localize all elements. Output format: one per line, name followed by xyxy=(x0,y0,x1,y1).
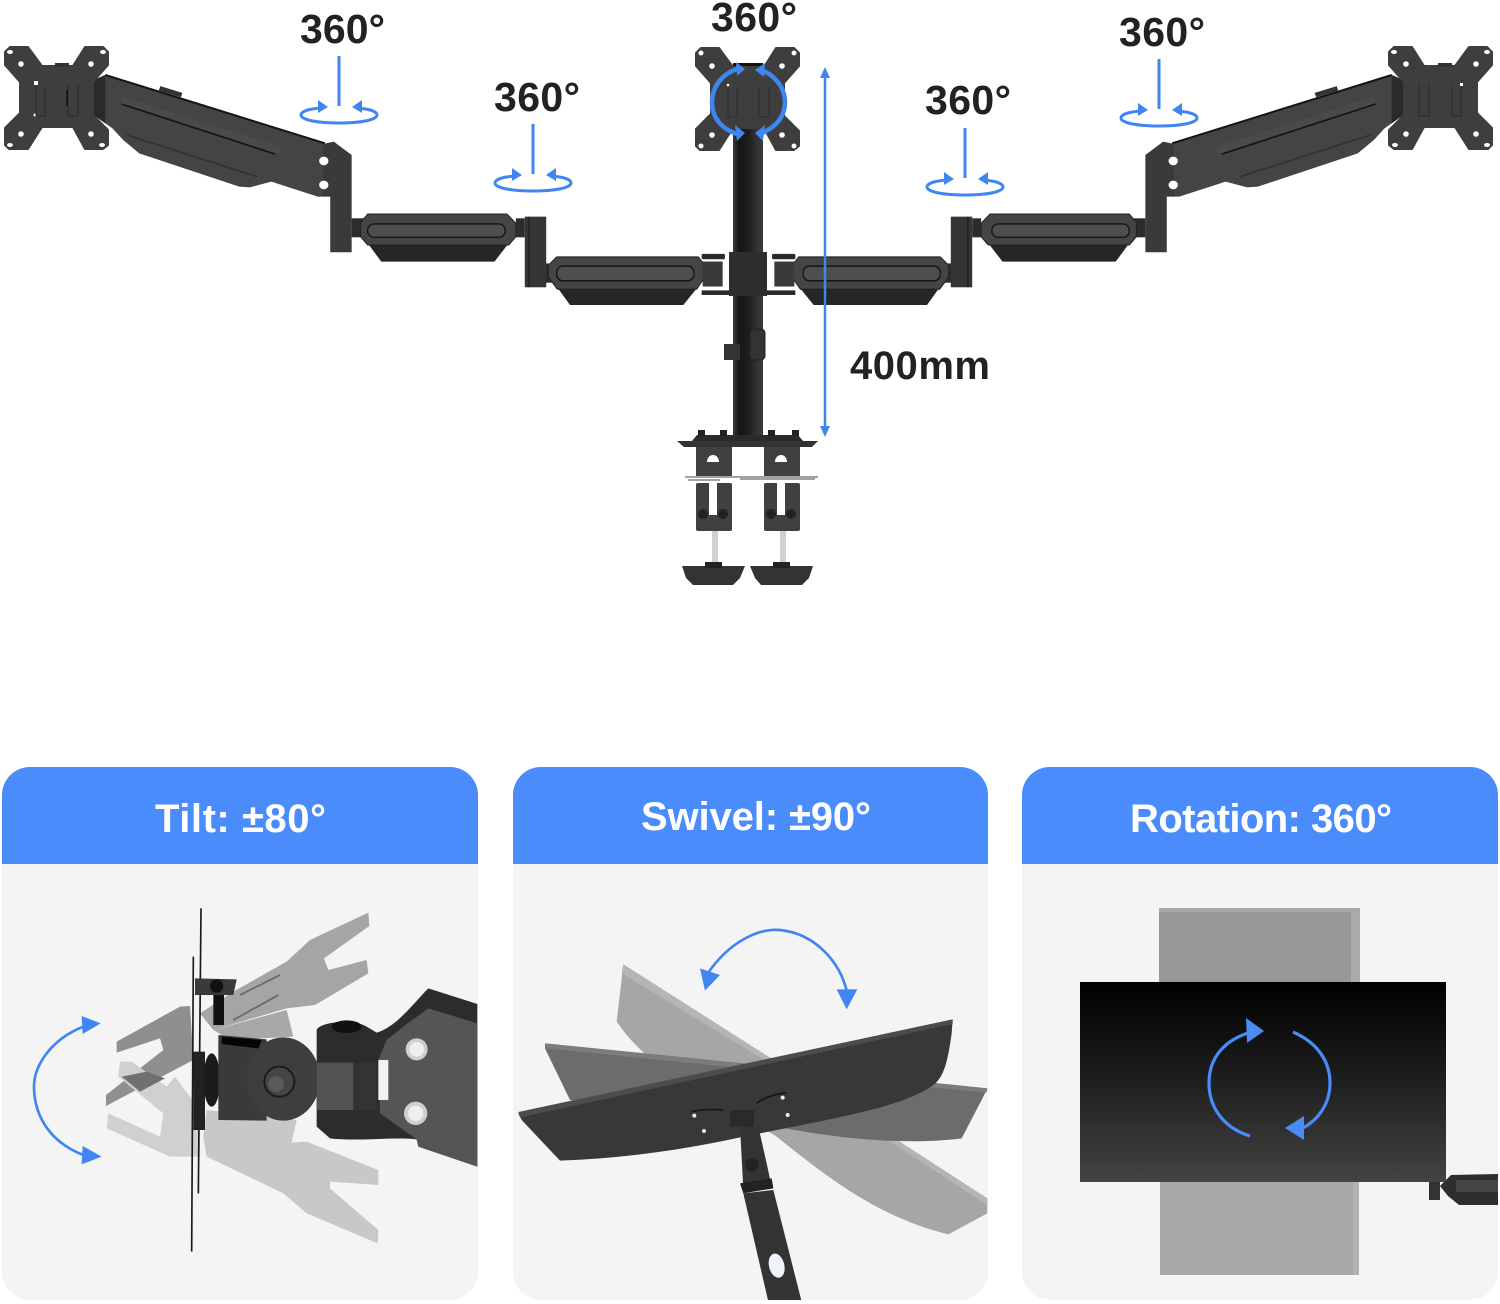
pole collar xyxy=(729,252,767,296)
label: 360 left outer: 360° xyxy=(300,6,385,52)
swivel illustration xyxy=(518,930,987,1302)
label: 400mm: 400mm xyxy=(850,344,990,388)
right mounting plate xyxy=(1389,47,1492,149)
cable clip xyxy=(724,329,765,360)
swivel indicator 1 xyxy=(301,56,377,123)
rotation header xyxy=(1022,767,1498,864)
tilt heading: Tilt: ±80° xyxy=(155,797,326,841)
label: 360 right outer: 360° xyxy=(1119,9,1205,55)
panel: swivel xyxy=(513,767,988,1302)
landscape monitor xyxy=(1080,982,1446,1182)
centre pole with top plate and clamp xyxy=(677,48,818,585)
label: 360 left inner: 360° xyxy=(494,74,580,120)
left lower arm xyxy=(352,214,546,287)
monitor arm: right side xyxy=(765,47,1492,305)
swivel indicator 3 xyxy=(927,128,1003,195)
rotation heading: Rotation: 360° xyxy=(1130,797,1392,841)
blue rotation circle on centre plate xyxy=(712,62,785,141)
right middle arm xyxy=(765,254,951,305)
swivel indicator 2 xyxy=(495,124,571,191)
support arm xyxy=(1429,1174,1498,1205)
left middle arm xyxy=(546,254,732,305)
tilt illustration xyxy=(34,908,477,1252)
centre pole xyxy=(733,125,763,435)
clamp gap line xyxy=(685,477,818,480)
clamp upper brackets xyxy=(696,447,800,476)
right lower arm xyxy=(951,214,1145,287)
clamp lower brackets xyxy=(696,483,800,531)
tilt arrow xyxy=(34,1016,102,1164)
monitor arm: left side xyxy=(5,47,732,305)
left upper gas-spring arm xyxy=(94,75,352,252)
clamp top plate xyxy=(677,430,818,447)
panel: rotation xyxy=(1022,767,1498,1300)
swivel arrow xyxy=(700,930,857,1009)
ghost portrait monitor xyxy=(1159,908,1360,1275)
centre mounting plate xyxy=(696,48,799,150)
swivel indicator 4 xyxy=(1121,59,1197,126)
clamp feet xyxy=(682,562,813,585)
swivel heading: Swivel: ±90° xyxy=(641,795,871,839)
right upper gas-spring arm xyxy=(1145,75,1403,252)
tilt header xyxy=(2,767,478,864)
left mounting plate xyxy=(5,47,108,149)
swivel header xyxy=(513,767,988,864)
height arrow xyxy=(820,67,830,437)
label: 360 right inner: 360° xyxy=(925,77,1011,123)
panel: tilt xyxy=(2,767,478,1300)
rotation arrows xyxy=(1209,1018,1330,1140)
clamp screws xyxy=(712,531,786,563)
clamp bracket holes xyxy=(707,455,787,462)
